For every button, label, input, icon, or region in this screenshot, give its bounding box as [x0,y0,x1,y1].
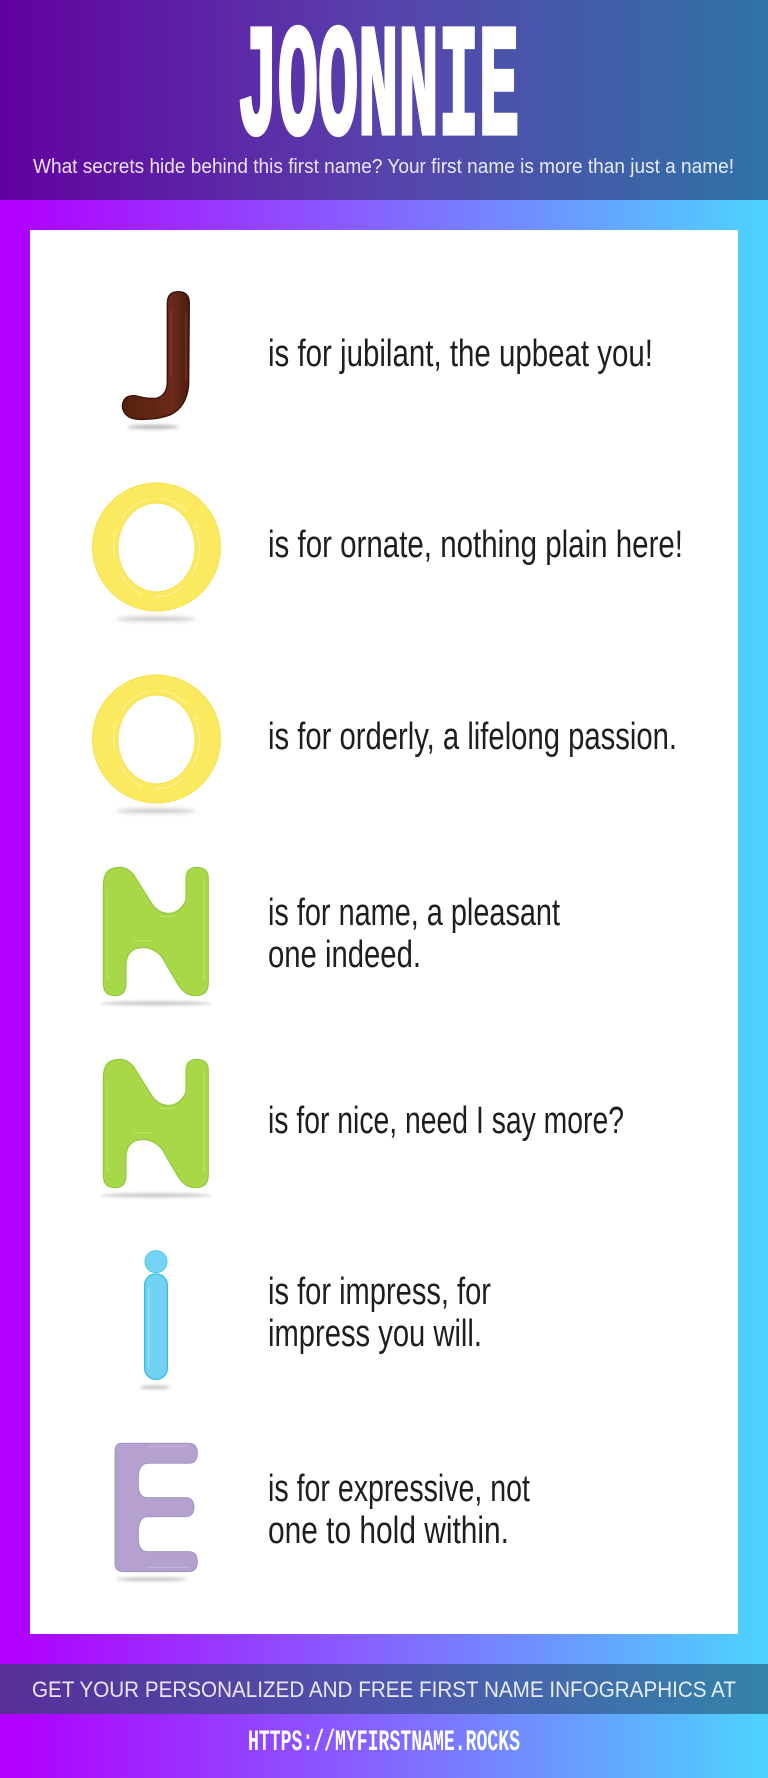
text: E: one to hold within. [268,1510,509,1552]
subtitle: What secrets hide behind this first name? Your first name is more than just a name! [33,156,734,178]
text: J: is for jubilant, the upbeat you! [268,333,653,375]
icon: letter N [101,867,211,1005]
icon: letter N second [101,1059,211,1197]
icon: letter i [140,1251,170,1389]
row: letter J [122,292,653,429]
icon: letter J [122,292,189,429]
text: I: impress you will. [268,1313,482,1355]
header band [0,0,768,200]
icon: letter E [115,1443,197,1581]
text: N second: is for nice, need I say more? [268,1100,624,1142]
text: N: is for name, a pleasant [268,892,560,934]
row: letter O [92,483,683,621]
footer band [0,1664,768,1714]
row: letter I [140,1251,491,1389]
text: I: is for impress, for [268,1271,491,1313]
title: JOONNIE [238,3,519,181]
text: N [268,892,560,976]
text: I [268,1271,491,1355]
panel: white card [30,230,738,1634]
row: letter N [101,867,560,1005]
icon: letter O [92,483,220,621]
footer link: HTTPS://MYFIRSTNAME.ROCKS [248,1726,520,1760]
icon: letter O second [92,675,220,813]
text: E [268,1468,530,1552]
text: E: is for expressive, not [268,1468,530,1510]
row: letter E [115,1443,530,1581]
text: N: one indeed. [268,934,421,976]
row: letter N second [101,1059,624,1197]
row: letter O second [92,675,677,813]
